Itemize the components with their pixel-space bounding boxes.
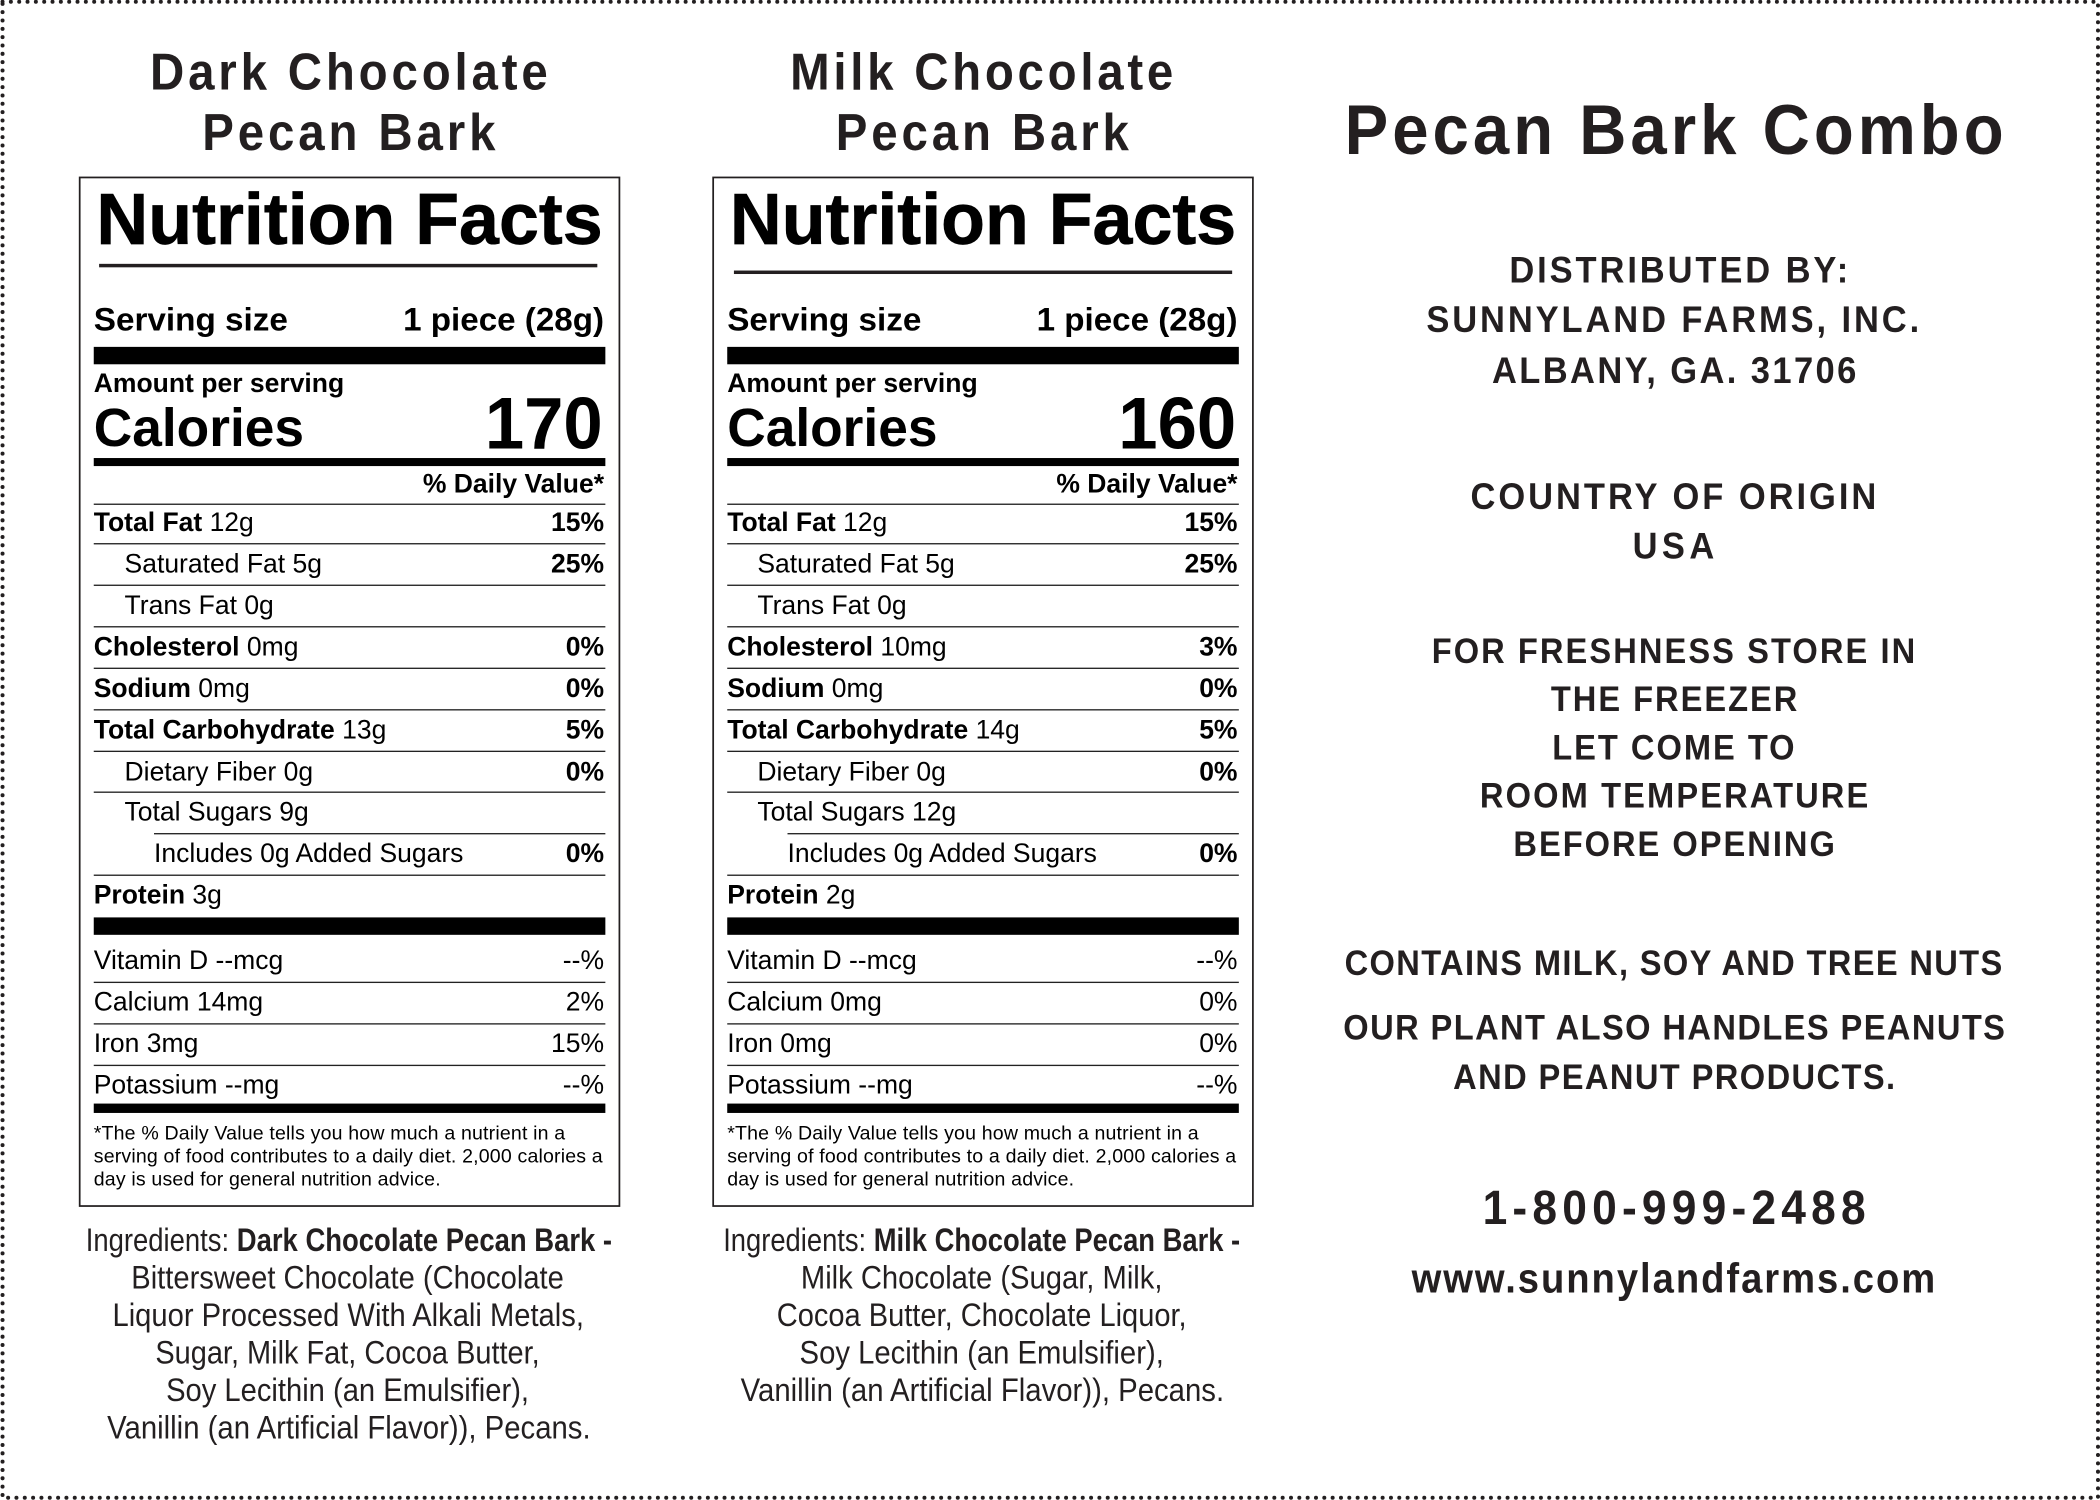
country of origin block: COUNTRY OF ORIGIN: [1471, 475, 1876, 517]
distributor block: SUNNYLAND FARMS, INC.: [1426, 298, 1919, 340]
row: calcium: Calcium 14mg: [94, 987, 263, 1017]
row: trans fat: Trans Fat 0g: [125, 590, 274, 620]
row: dietary fiber: Dietary Fiber 0g: [757, 756, 946, 786]
contact details: www.sunnylandfarms.com: [1411, 1256, 1935, 1302]
ingredients: dark chocolate: Liquor Processed With Alkali Metals,: [112, 1297, 584, 1333]
row: sodium: 0%: [1199, 673, 1237, 703]
heading: milk chocolate pecan bark: Pecan Bark: [836, 104, 1129, 161]
storage instructions: FOR FRESHNESS STORE IN: [1432, 632, 1915, 671]
storage instructions: LET COME TO: [1552, 728, 1795, 768]
storage instructions: [1432, 632, 1915, 864]
row: total carbohydrate: [727, 715, 1238, 745]
row: added sugars: 0%: [566, 838, 604, 868]
ingredients: milk chocolate: Cocoa Butter, Chocolate Liquor,: [777, 1297, 1187, 1333]
ingredients: dark chocolate: [86, 1222, 612, 1445]
row: total carbohydrate: Total Carbohydrate 14g: [727, 715, 1020, 745]
row: total fat: Total Fat 12g: [94, 507, 254, 537]
row: total carbohydrate: 5%: [566, 715, 604, 745]
heading: dark chocolate pecan bark: Dark Chocolate: [150, 44, 548, 101]
row: cholesterol: [94, 632, 604, 662]
main title: Pecan Bark Combo: [1345, 91, 2004, 170]
serving size row: [727, 300, 1238, 337]
footnote: *The % Daily Value tells you how much a nutrient in a: [94, 1123, 565, 1145]
footnote: serving of food contributes to a daily diet. 2,000 calories a: [727, 1145, 1236, 1167]
footnote: day is used for general nutrition advice.: [94, 1168, 441, 1190]
calories block: [727, 368, 1236, 465]
row: calcium: 0%: [1199, 987, 1237, 1017]
footnote: [94, 1123, 603, 1190]
row: dietary fiber: 0%: [566, 756, 604, 786]
row: potassium: --%: [1196, 1070, 1237, 1100]
allergen statement: [1343, 944, 2005, 1097]
nutrition facts title: Nutrition Facts: [96, 180, 603, 260]
row: sodium: [727, 673, 1238, 703]
row: added sugars: Includes 0g Added Sugars: [788, 838, 1097, 868]
row: total sugars: Total Sugars 9g: [125, 796, 309, 826]
row: dietary fiber: Dietary Fiber 0g: [125, 756, 313, 786]
heading: dark chocolate pecan bark: Pecan Bark: [202, 104, 496, 161]
country of origin block: [1471, 475, 1876, 567]
row: protein: Protein 2g: [727, 879, 855, 909]
row: potassium: Potassium --mg: [94, 1070, 279, 1100]
row: iron: [727, 1028, 1238, 1058]
row: vitamin d: [94, 945, 604, 975]
row: vitamin d: Vitamin D --mcg: [727, 945, 917, 975]
row: potassium: --%: [563, 1070, 604, 1100]
row: total carbohydrate: Total Carbohydrate 13g: [94, 715, 386, 745]
row: total carbohydrate: [94, 715, 604, 745]
row: total fat: Total Fat 12g: [727, 507, 887, 537]
row: added sugars: Includes 0g Added Sugars: [154, 838, 463, 868]
distributor block: [1426, 248, 1919, 391]
serving size row: Serving size: [727, 300, 921, 337]
row: saturated fat: 25%: [1184, 549, 1237, 579]
row: calcium: [94, 987, 604, 1017]
heading: dark chocolate pecan bark: [150, 44, 548, 161]
allergen statement: AND PEANUT PRODUCTS.: [1453, 1058, 1895, 1097]
row: total fat: 15%: [1184, 507, 1237, 537]
calories block: Calories: [727, 399, 937, 458]
row: saturated fat: [125, 549, 604, 579]
row: total fat: [94, 507, 604, 537]
row: cholesterol: 0%: [566, 632, 604, 662]
row: added sugars: [788, 838, 1238, 868]
nutrition facts label: milk chocolate: [713, 177, 1253, 1206]
allergen statement: OUR PLANT ALSO HANDLES PEANUTS: [1343, 1008, 2005, 1048]
calories block: [94, 368, 603, 465]
footnote: day is used for general nutrition advice.: [727, 1168, 1074, 1190]
row: added sugars: 0%: [1199, 838, 1237, 868]
row: cholesterol: [727, 632, 1238, 662]
daily value header: % Daily Value*: [423, 468, 605, 498]
footnote: *The % Daily Value tells you how much a nutrient in a: [727, 1123, 1199, 1145]
footnote: [727, 1123, 1236, 1190]
storage instructions: BEFORE OPENING: [1513, 825, 1835, 864]
row: sodium: 0%: [566, 673, 604, 703]
heading: milk chocolate pecan bark: Milk Chocolate: [790, 44, 1173, 101]
row: total sugars: Total Sugars 12g: [757, 796, 956, 826]
ingredients: dark chocolate: Soy Lecithin (an Emulsifier),: [166, 1372, 529, 1408]
row: dietary fiber: 0%: [1199, 756, 1237, 786]
row: dietary fiber: [757, 756, 1238, 786]
row: dietary fiber: [125, 756, 604, 786]
row: iron: Iron 0mg: [727, 1028, 832, 1058]
row: potassium: Potassium --mg: [727, 1070, 913, 1100]
footnote: serving of food contributes to a daily diet. 2,000 calories a: [94, 1145, 603, 1167]
ingredients: dark chocolate: Sugar, Milk Fat, Cocoa Butter,: [155, 1334, 540, 1370]
row: saturated fat: Saturated Fat 5g: [125, 549, 322, 579]
serving size row: 1 piece (28g): [1037, 300, 1237, 337]
row: total fat: [727, 507, 1238, 537]
row: vitamin d: --%: [563, 945, 604, 975]
row: sodium: Sodium 0mg: [94, 673, 250, 703]
calories block: 170: [485, 382, 603, 465]
row: iron: Iron 3mg: [94, 1028, 198, 1058]
daily value header: % Daily Value*: [1056, 468, 1238, 498]
row: saturated fat: Saturated Fat 5g: [757, 549, 955, 579]
row: saturated fat: 25%: [551, 549, 604, 579]
calories block: 160: [1118, 382, 1236, 465]
row: protein: Protein 3g: [94, 879, 222, 909]
row: sodium: Sodium 0mg: [727, 673, 883, 703]
row: sodium: [94, 673, 604, 703]
row: cholesterol: 3%: [1199, 632, 1237, 662]
ingredients: milk chocolate: Ingredients: Milk Chocolate Pecan Bark -: [723, 1222, 1240, 1258]
nutrition facts label: dark chocolate: [80, 177, 619, 1206]
row: added sugars: [154, 838, 604, 868]
storage instructions: ROOM TEMPERATURE: [1480, 776, 1868, 816]
contact details: [1411, 1180, 1935, 1302]
row: vitamin d: --%: [1196, 945, 1237, 975]
row: cholesterol: Cholesterol 0mg: [94, 632, 298, 662]
row: calcium: Calcium 0mg: [727, 987, 882, 1017]
serving size row: Serving size: [94, 300, 288, 337]
ingredients: milk chocolate: [723, 1222, 1240, 1408]
ingredients: milk chocolate: Vanillin (an Artificial Flavor)), Pecans.: [741, 1372, 1224, 1408]
serving size row: [94, 300, 604, 337]
row: vitamin d: [727, 945, 1238, 975]
storage instructions: THE FREEZER: [1551, 680, 1797, 719]
panel: dark chocolate pecan bark: [80, 44, 619, 1445]
distributor block: DISTRIBUTED BY:: [1509, 248, 1848, 291]
row: potassium: [727, 1070, 1238, 1100]
row: cholesterol: Cholesterol 10mg: [727, 632, 947, 662]
heading: milk chocolate pecan bark: [790, 44, 1173, 161]
panel: product information: [1343, 91, 2005, 1302]
calories block: Calories: [94, 399, 304, 458]
ingredients: dark chocolate: Vanillin (an Artificial Flavor)), Pecans.: [107, 1409, 591, 1445]
panel: milk chocolate pecan bark: [713, 44, 1253, 1408]
ingredients: milk chocolate: Milk Chocolate (Sugar, Milk,: [801, 1259, 1162, 1295]
allergen statement: CONTAINS MILK, SOY AND TREE NUTS: [1345, 944, 2002, 983]
row: iron: 15%: [551, 1028, 604, 1058]
ingredients: milk chocolate: Soy Lecithin (an Emulsifier),: [800, 1334, 1164, 1370]
row: iron: [94, 1028, 604, 1058]
row: saturated fat: [757, 549, 1238, 579]
country of origin block: USA: [1633, 524, 1714, 567]
row: iron: 0%: [1199, 1028, 1237, 1058]
row: total carbohydrate: 5%: [1199, 715, 1237, 745]
calories block: Amount per serving: [727, 368, 978, 398]
serving size row: 1 piece (28g): [403, 300, 604, 337]
row: trans fat: Trans Fat 0g: [757, 590, 907, 620]
calories block: Amount per serving: [94, 368, 344, 398]
ingredients: dark chocolate: Bittersweet Chocolate (Chocolate: [131, 1259, 564, 1295]
contact details: 1-800-999-2488: [1483, 1180, 1866, 1235]
distributor block: ALBANY, GA. 31706: [1492, 349, 1856, 391]
row: potassium: [94, 1070, 604, 1100]
row: calcium: 2%: [566, 987, 604, 1017]
ingredients: dark chocolate: Ingredients: Dark Chocolate Pecan Bark -: [86, 1222, 612, 1258]
nutrition facts title: Nutrition Facts: [730, 180, 1236, 260]
row: vitamin d: Vitamin D --mcg: [94, 945, 283, 975]
row: calcium: [727, 987, 1238, 1017]
row: total fat: 15%: [551, 507, 604, 537]
